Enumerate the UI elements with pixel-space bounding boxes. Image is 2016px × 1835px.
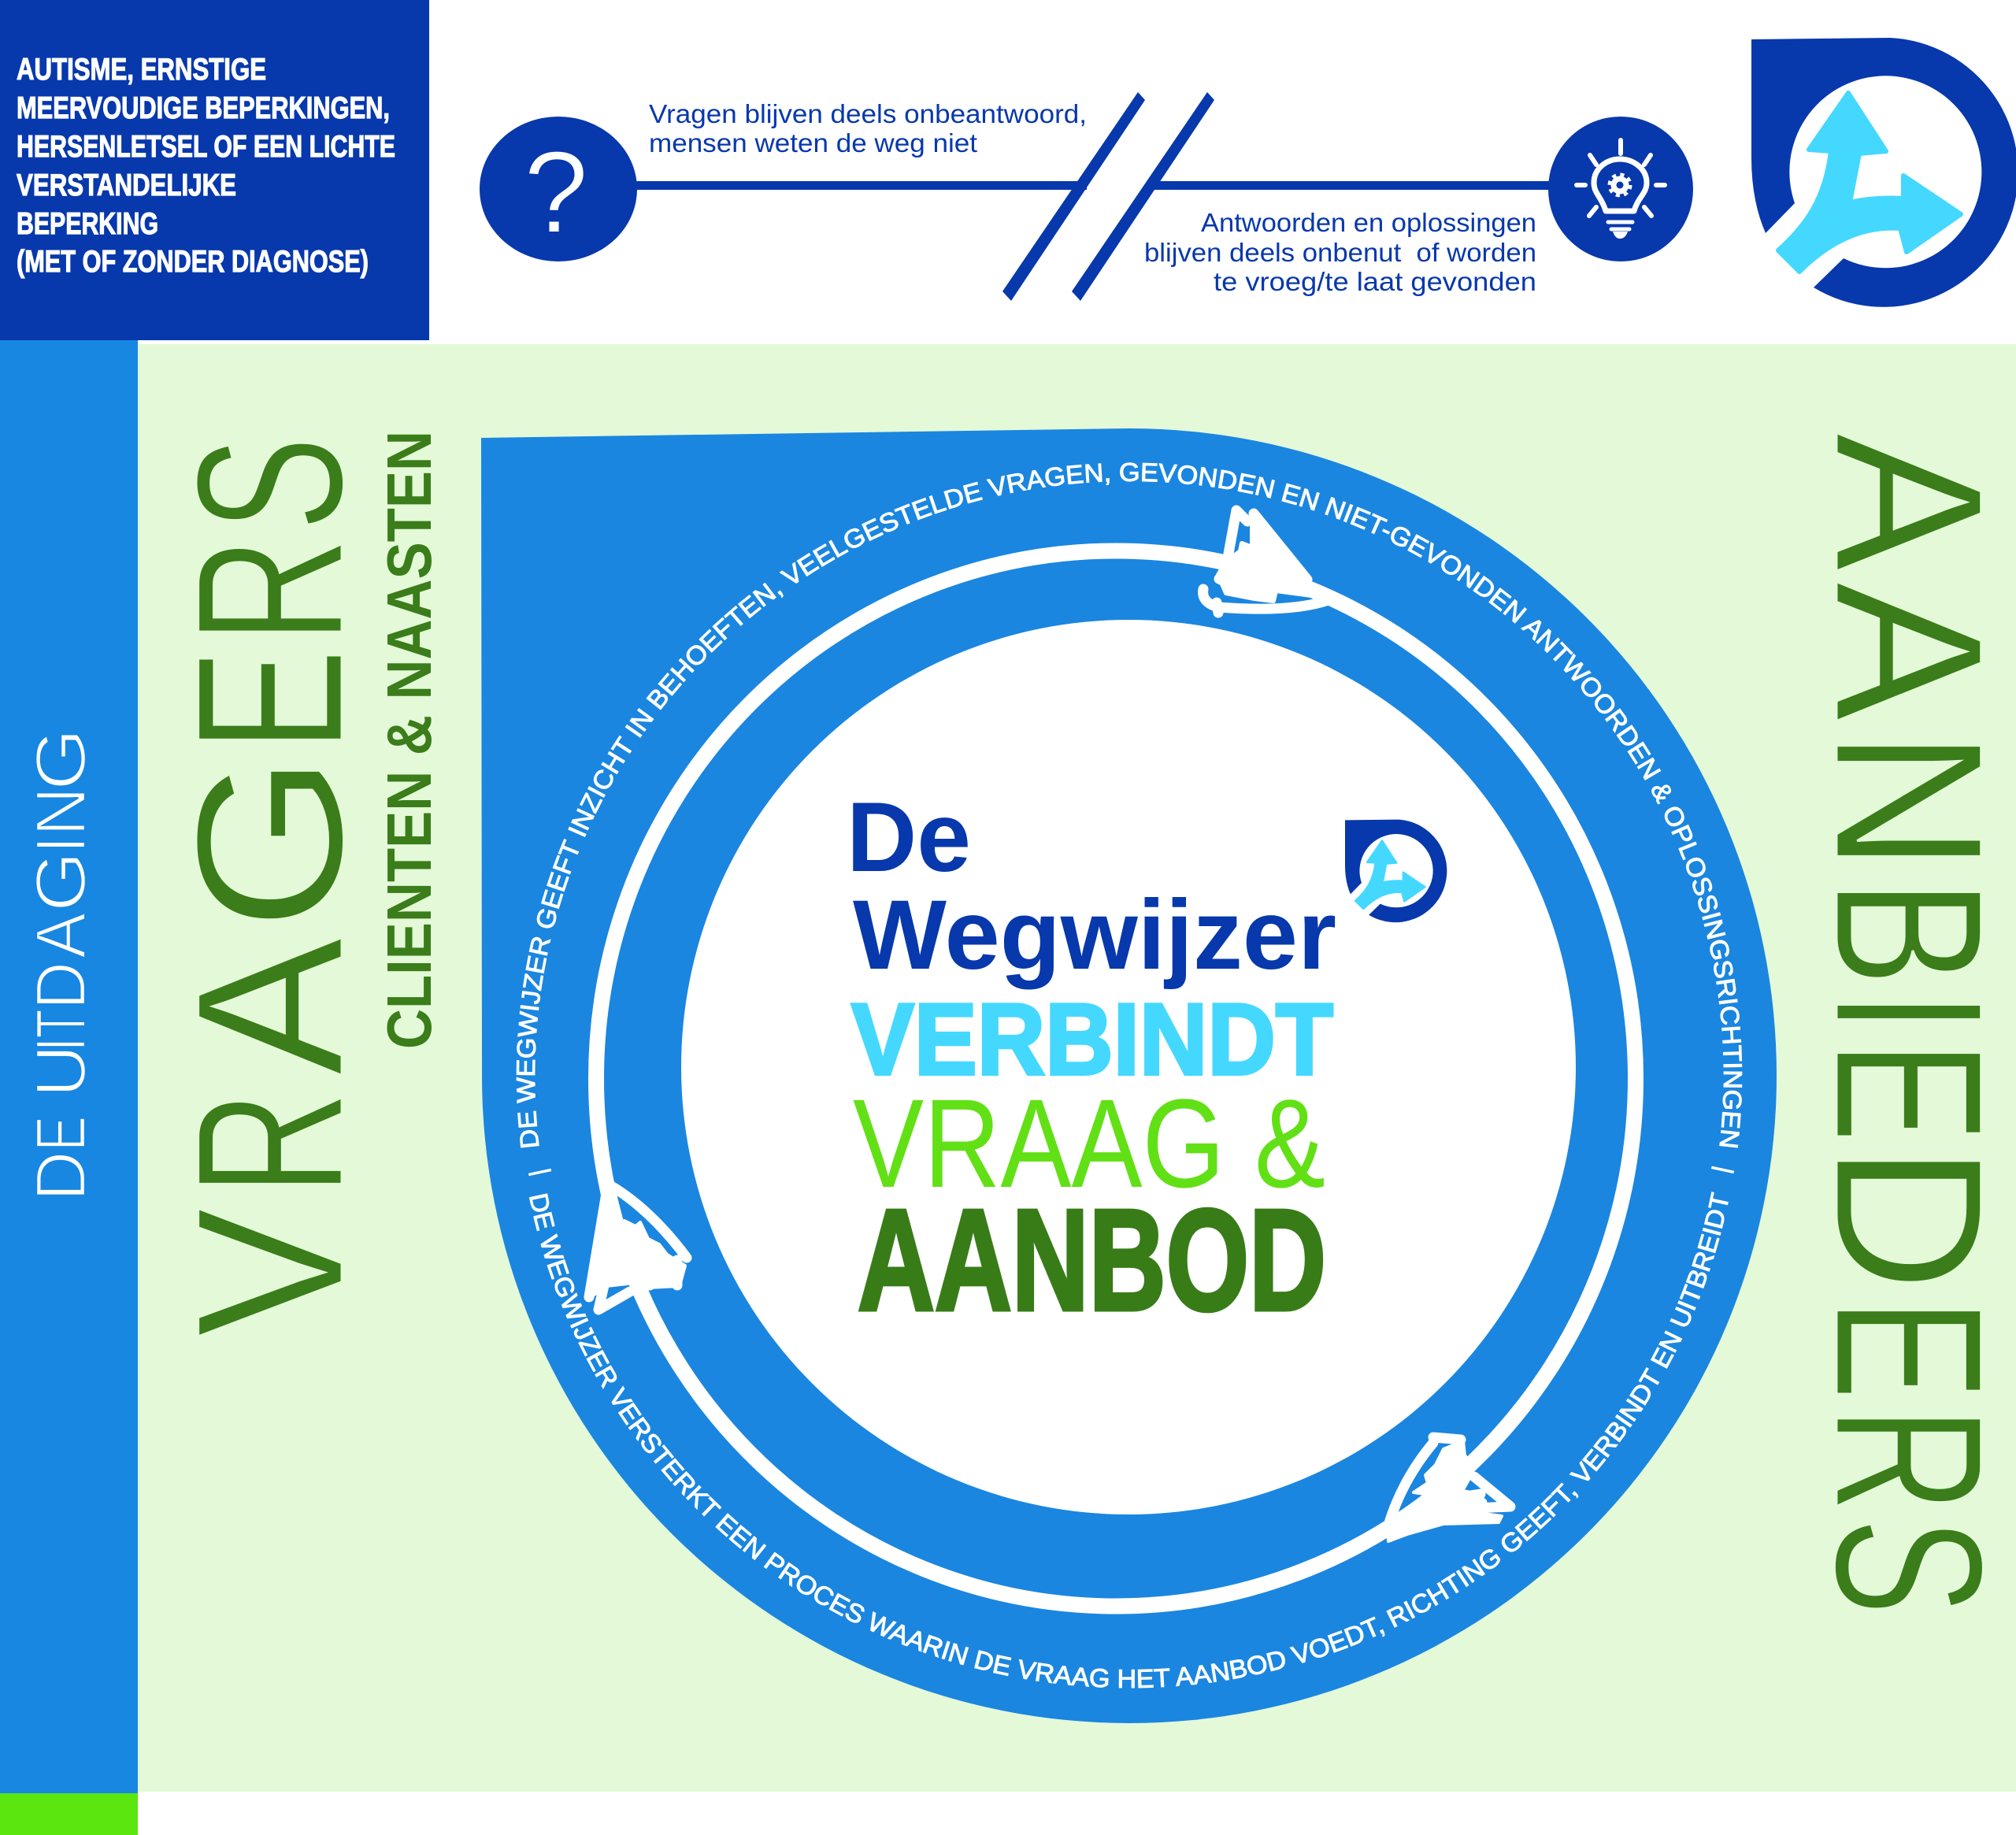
white centre circle [681,620,1576,1514]
panel: target group: (MET OF ZONDER DIAGNOSE) [17,245,369,279]
heading: vragers: R [154,537,387,643]
panel: green background [138,344,2016,1792]
title: de wegwijzer: Wegwijzer [853,880,1336,990]
heading: vragers: G [154,753,387,931]
heading: vragers: V [154,1207,387,1337]
text: questions remain [649,99,1087,158]
arrow: top scribble [1203,510,1329,613]
heading: de uitdaging: I [22,836,101,853]
text: answers remain unused: blijven deels onbenut of worden [1144,238,1536,267]
arrow: left scribble [589,1187,687,1310]
panel: blue D shape [481,428,1777,1723]
heading: vragers: E [154,649,387,752]
heading: de uitdaging: U [22,1044,101,1097]
connector line right [1154,181,1551,190]
panel: bright green corner [0,1793,138,1835]
arrow: bottom scribble [1388,1437,1510,1541]
heading: de uitdaging: G [22,728,101,791]
text: circular top statement: DE WEGWIJZER GEEFT INZICHT IN BEHOEFTEN, VEELGESTELDE VRAGEN, GEVONDEN EN NIET-GEVONDEN ANTWOORDEN & OPLOSSINGSRICHTINGEN [517,462,1742,1148]
separator left: | [528,1166,554,1177]
title: aanbod: AANBOD [858,1179,1326,1340]
text: answers remain unused [1144,208,1536,296]
panel: target group: AUTISME, ERNSTIGE [17,53,266,87]
panel: target group: VERSTANDELIJKE [17,169,236,202]
heading: aanbieders [1792,432,2016,1615]
heading: vragers: A [154,936,387,1076]
panel: target group: HERSENLETSEL OF EEN LICHTE [17,130,395,164]
icon: question mark circle: ? [524,128,588,258]
separator right: | [1708,1164,1735,1175]
text: circular bottom statement: DE WEGWIJZER VERSTERKT EEN PROCES WAARIN DE VRAAG HET AANBOD VOEDT, RICHTING GEEFT, VERBINDT EN UITBREIDT [529,1192,1729,1689]
panel: left blue stripe [0,340,138,1793]
panel: target group: MEERVOUDIGE BEPERKINGEN, [17,91,390,125]
heading: de uitdaging: T [22,1010,101,1038]
title: vraag en: VRAAG & [853,1073,1325,1214]
text: questions remain: mensen weten de weg niet [649,128,977,158]
heading: de uitdaging: G [22,851,101,912]
heading: de uitdaging: D [22,962,101,1010]
connector line left [635,181,1087,190]
heading: de uitdaging: E [22,1116,101,1151]
heading: vragers: R [154,1091,387,1196]
slash marks [1002,92,1214,301]
text: answers remain unused: te vroeg/te laat gevonden [1214,267,1536,296]
title: de wegwijzer [847,783,1336,990]
heading: de uitdaging: D [22,1151,101,1201]
heading: de uitdaging: A [22,913,101,958]
icon: light bulb circle [1548,117,1693,261]
heading: de uitdaging: N [22,787,101,836]
text: questions remain: Vragen blijven deels onbeantwoord, [649,99,1087,128]
panel: target group: BEPERKING [17,207,158,241]
heading: clienten en naasten: CLIENTEN & NAASTEN [374,431,444,1049]
title: verbindt: VERBINDT [851,983,1333,1096]
heading: de uitdaging: I [22,1037,101,1051]
icon: logo large [1751,38,2016,307]
panel: target group [0,0,429,340]
heading: vragers [154,436,387,1337]
text: answers remain unused: Antwoorden en oplossingen [1201,208,1536,237]
heading: vragers: S [154,436,387,531]
icon: question mark circle [480,117,637,261]
white ring [596,551,1636,1607]
heading: de uitdaging [22,728,101,1201]
title: de wegwijzer: De [847,783,971,892]
icon: logo small [1345,820,1447,922]
